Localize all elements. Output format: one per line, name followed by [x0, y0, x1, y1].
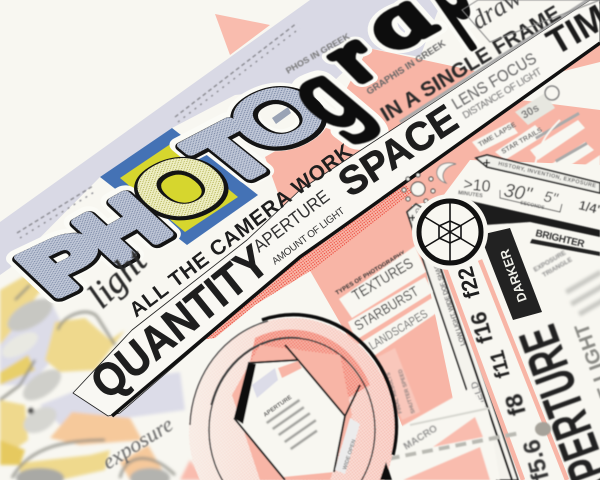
iris opening	[232, 345, 352, 480]
iris side blade label	[335, 418, 360, 474]
panel: types of photography: STARBURST	[351, 283, 422, 334]
aperture card heading: APERTURE	[263, 395, 293, 419]
word: light: light	[79, 240, 155, 316]
icon: aperture wheel	[412, 194, 488, 270]
title white halo: g	[243, 47, 396, 145]
title white halo: P	[1, 217, 132, 310]
panel: macro focal guide	[350, 388, 551, 480]
panel: top-right script box	[462, 0, 600, 42]
tag: landscapes	[357, 298, 438, 360]
note: small text on pink	[376, 348, 420, 420]
panel: white strip in a single frame	[420, 0, 600, 71]
note: small text on pink: SHUTTER SPEED	[398, 368, 417, 414]
grey annotation blocks	[530, 120, 585, 160]
grey doodles	[2, 292, 58, 338]
sketch outlines	[0, 285, 175, 478]
panel: time scale	[472, 86, 600, 172]
strip: fixation plus bar: HISTORY, INVENTION, EXPOSURE	[498, 161, 597, 190]
strip label: LOW LIGHT, WIDE DOF, SHARPER BACKGROUND	[414, 207, 467, 347]
panel: aperture ring	[189, 315, 396, 480]
title black outline: O	[203, 66, 356, 172]
panel: lower left illustration	[0, 270, 205, 480]
label: PHOS IN GREEK: PHOS IN GREEK	[284, 32, 352, 76]
word: lens focus: LENS FOCUS	[448, 49, 540, 113]
panel: darker label block	[480, 228, 542, 320]
strip: depth of field	[407, 204, 518, 480]
f-stop f/8: f8	[500, 391, 532, 418]
icon: camera in letter O	[272, 107, 291, 124]
lowercase graph: r	[296, 21, 404, 94]
moon icon	[437, 163, 456, 183]
title white halo: T	[166, 108, 296, 199]
title black outline: P	[2, 219, 133, 312]
lowercase graph	[243, 0, 495, 145]
unit minutes: MINUTES	[458, 190, 483, 199]
panel: quantity space time band	[73, 0, 600, 416]
letter O yellow: O	[106, 135, 256, 239]
strip: fixation plus bar	[476, 155, 600, 193]
labels: time lapse and star trails	[472, 122, 518, 152]
iris pentagon white	[235, 360, 345, 477]
iris lavender inset	[252, 368, 278, 398]
label: types heading: TYPES OF PHOTOGRAPHY	[335, 250, 407, 297]
speed: over ten minutes: >10	[463, 176, 491, 196]
yellow figures	[0, 270, 48, 345]
title white halo	[1, 0, 495, 310]
label: macro: MACRO	[402, 423, 440, 453]
pink triangle top	[215, 14, 270, 55]
ring outer heavy edge	[262, 315, 396, 455]
speed: thirty seconds: 30"	[502, 180, 534, 206]
word: quantity: QUANTITY	[81, 235, 278, 409]
word: aperture: APERTURE	[249, 186, 333, 256]
letter P: P	[1, 217, 132, 310]
f-stop f/11: f11	[486, 348, 515, 380]
halftone edge along band	[200, 184, 412, 340]
title black outline	[2, 66, 356, 312]
letter T: T	[166, 108, 296, 199]
strip: shutter speeds: SECONDS	[520, 200, 546, 211]
script word: exposure: exposure	[97, 411, 178, 474]
label: field: FIELD	[469, 380, 489, 411]
panel: pink wedge behind headline	[265, 48, 475, 207]
headline: all the camera work: ALL THE CAMERA WORK	[125, 140, 356, 322]
title: PHOTOgraphy	[1, 0, 495, 312]
white patch upper right	[520, 62, 600, 110]
panel: lavender title backdrop	[0, 0, 450, 275]
orange patches	[50, 412, 142, 445]
lavender panels	[0, 300, 70, 385]
word: space: SPACE	[331, 97, 466, 206]
speed: five seconds: 5"	[542, 188, 560, 208]
title black outline: H	[59, 181, 189, 279]
band bottom shadow edge	[112, 43, 600, 416]
headline: in a single frame: IN A SINGLE FRAME	[377, 2, 565, 126]
letter H: H	[58, 179, 188, 278]
strip: shutter speeds	[458, 172, 600, 232]
title black outline: T	[167, 110, 297, 200]
title white halo: O	[202, 65, 355, 170]
panel: lower right paper	[412, 205, 600, 480]
panel: types of photography: LANDSCAPES	[366, 307, 430, 353]
panel: logo blue and yellow squares	[100, 128, 258, 245]
label: brighter: BRIGHTER	[534, 228, 586, 250]
panel: main pink field below band	[305, 43, 600, 433]
lowercase graph: g	[243, 47, 396, 145]
letter O: O	[202, 65, 355, 170]
title black outline: O	[107, 137, 256, 241]
note: exposure triangle: EXPOSURE	[532, 249, 568, 274]
sun icon	[402, 173, 435, 203]
note: grey body text	[565, 270, 600, 316]
plus sign: +	[409, 211, 416, 225]
sub: amount of light: AMOUNT OF LIGHT	[270, 206, 347, 267]
band top grey rule	[400, 0, 600, 122]
f-stop f/16: f16	[465, 309, 498, 346]
panel: types of photography	[335, 246, 438, 360]
sketch camera tag	[515, 93, 555, 125]
panel: time scale: STAR TRAILS	[500, 127, 544, 156]
panel: f-stop strip	[440, 240, 575, 480]
sub: distance of light: DISTANCE OF LIGHT	[461, 66, 544, 122]
note: small text on pink: FINAL RESULTS	[386, 371, 404, 414]
ring inner red halftone	[250, 330, 370, 400]
panel: time scale: 30s	[520, 102, 541, 122]
black hub at foot	[380, 462, 392, 480]
tag: starburst	[348, 277, 433, 340]
f-stop f/22: f22	[452, 264, 485, 301]
label: darker: DARKER	[497, 247, 530, 304]
title white halo: r	[296, 21, 404, 94]
panel: types of photography: TEXTURES	[349, 255, 416, 304]
black wedge brighter bar	[462, 199, 600, 256]
ruler ticks	[17, 23, 300, 238]
plus sign: +	[483, 155, 491, 170]
tag: textures	[339, 246, 426, 318]
title white halo: H	[58, 179, 188, 278]
aperture card body	[266, 399, 318, 450]
label: GRAPHIS IN GREEK: GRAPHIS IN GREEK	[365, 38, 448, 97]
panel: time scale: TIME LAPSE	[478, 122, 518, 149]
note: exposure triangle: TRIANGLE	[541, 256, 574, 279]
panel: aperture ring: WIDE OPEN	[342, 439, 358, 471]
